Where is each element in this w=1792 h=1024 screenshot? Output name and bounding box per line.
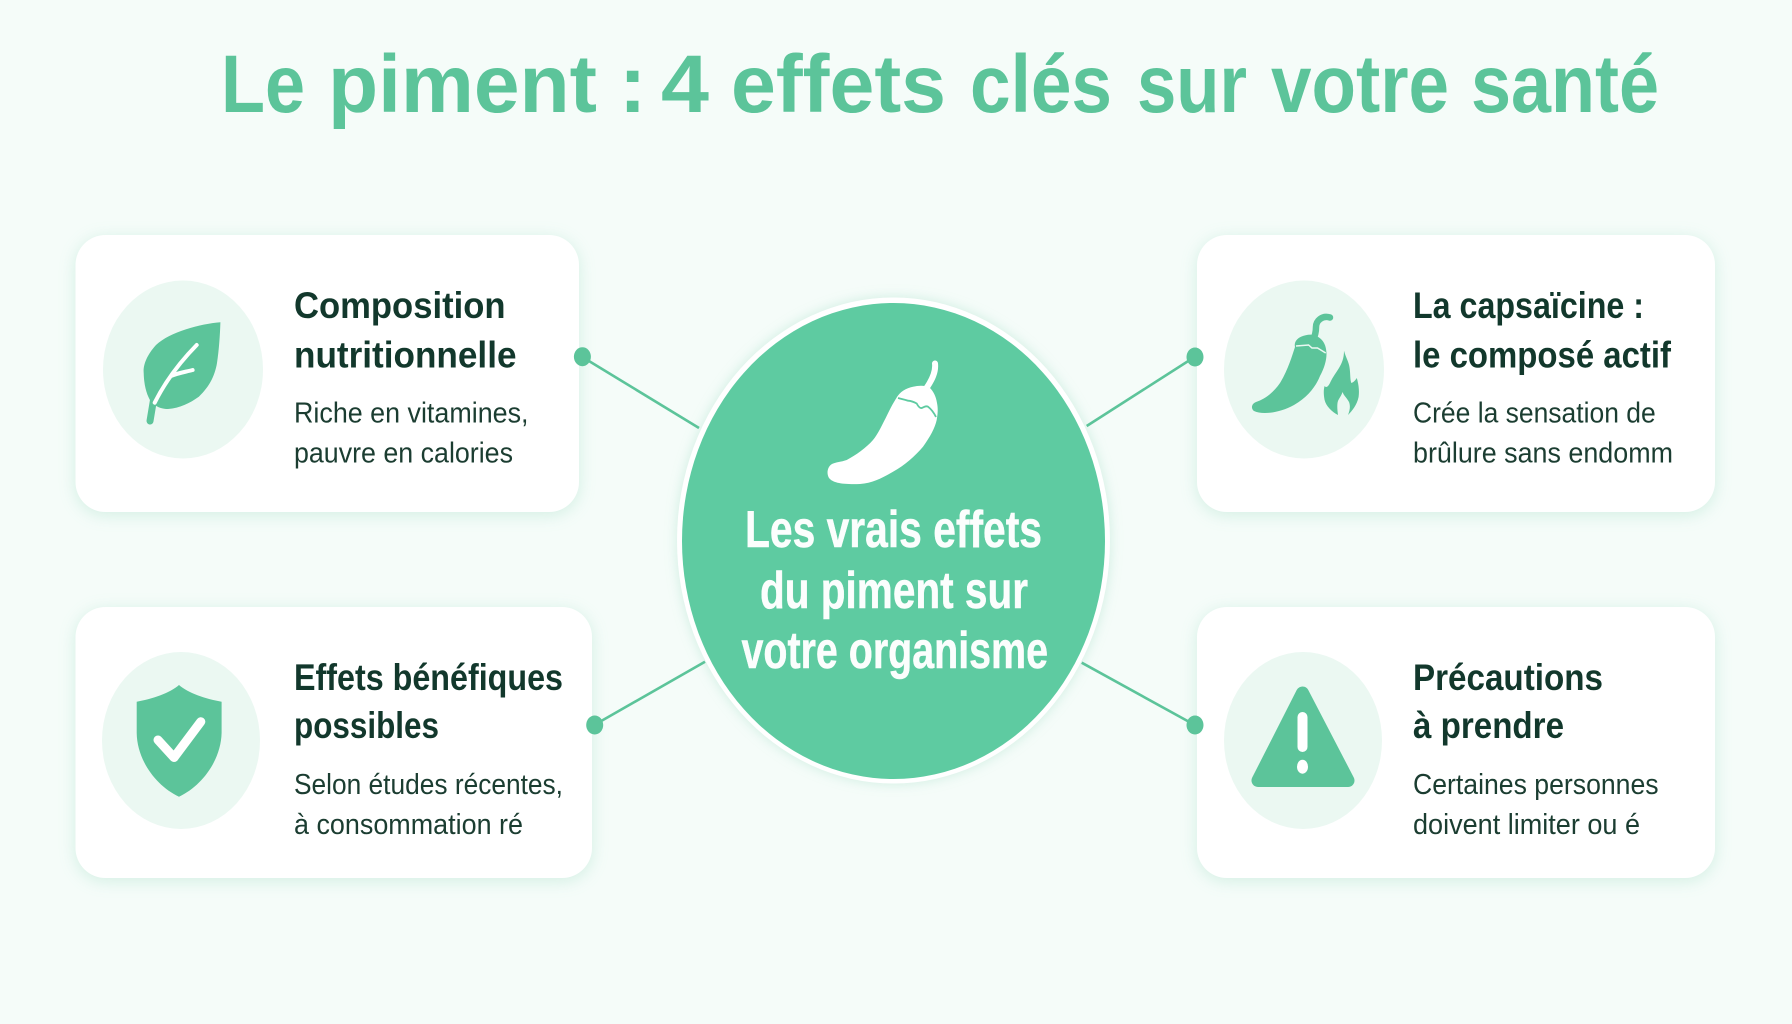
icon: leaf xyxy=(144,322,220,421)
central circle xyxy=(677,298,1110,784)
connector: bottom left xyxy=(586,662,705,734)
connector: top left xyxy=(574,347,699,428)
panel: effets bénéfiques xyxy=(76,607,592,878)
title: Le xyxy=(221,39,305,130)
heading: Composition xyxy=(294,285,506,326)
title: clés xyxy=(970,39,1112,130)
panel: précautions xyxy=(1197,607,1715,878)
center text: du piment sur xyxy=(760,562,1028,620)
description: Riche en vitamines, xyxy=(294,398,528,430)
center text: Les vrais effets xyxy=(745,501,1042,559)
heading: Précautions xyxy=(1413,657,1603,698)
icon: chili xyxy=(828,364,938,484)
title: : xyxy=(619,39,646,130)
heading: le composé actif xyxy=(1413,335,1672,376)
title: sur xyxy=(1137,39,1247,130)
description: à consommation ré xyxy=(294,809,523,841)
heading: La capsaïcine : xyxy=(1413,285,1644,326)
heading: nutritionnelle xyxy=(294,335,516,376)
description: doivent limiter ou é xyxy=(1413,809,1640,841)
heading: Effets bénéfiques xyxy=(294,657,563,698)
heading: possibles xyxy=(294,705,439,746)
icon: shield with check xyxy=(137,685,222,797)
icon: warning triangle xyxy=(1258,693,1348,780)
description: Selon études récentes, xyxy=(294,769,563,801)
panel: composition nutritionnelle xyxy=(76,235,579,512)
title: votre xyxy=(1271,39,1449,130)
title: effets xyxy=(731,39,946,130)
icon: chili and flame xyxy=(1252,317,1359,415)
connector: top right xyxy=(1087,348,1204,426)
description: Crée la sensation de xyxy=(1413,398,1656,430)
description: Certaines personnes xyxy=(1413,769,1659,801)
description: brûlure sans endomm xyxy=(1413,438,1673,470)
center text: votre organisme xyxy=(742,622,1048,680)
title: santé xyxy=(1471,39,1659,130)
title: piment xyxy=(328,39,597,130)
connector: bottom right xyxy=(1082,663,1204,734)
panel: la capsaïcine xyxy=(1197,235,1715,512)
title: 4 xyxy=(661,39,709,130)
heading: à prendre xyxy=(1413,705,1564,746)
description: pauvre en calories xyxy=(294,438,513,470)
